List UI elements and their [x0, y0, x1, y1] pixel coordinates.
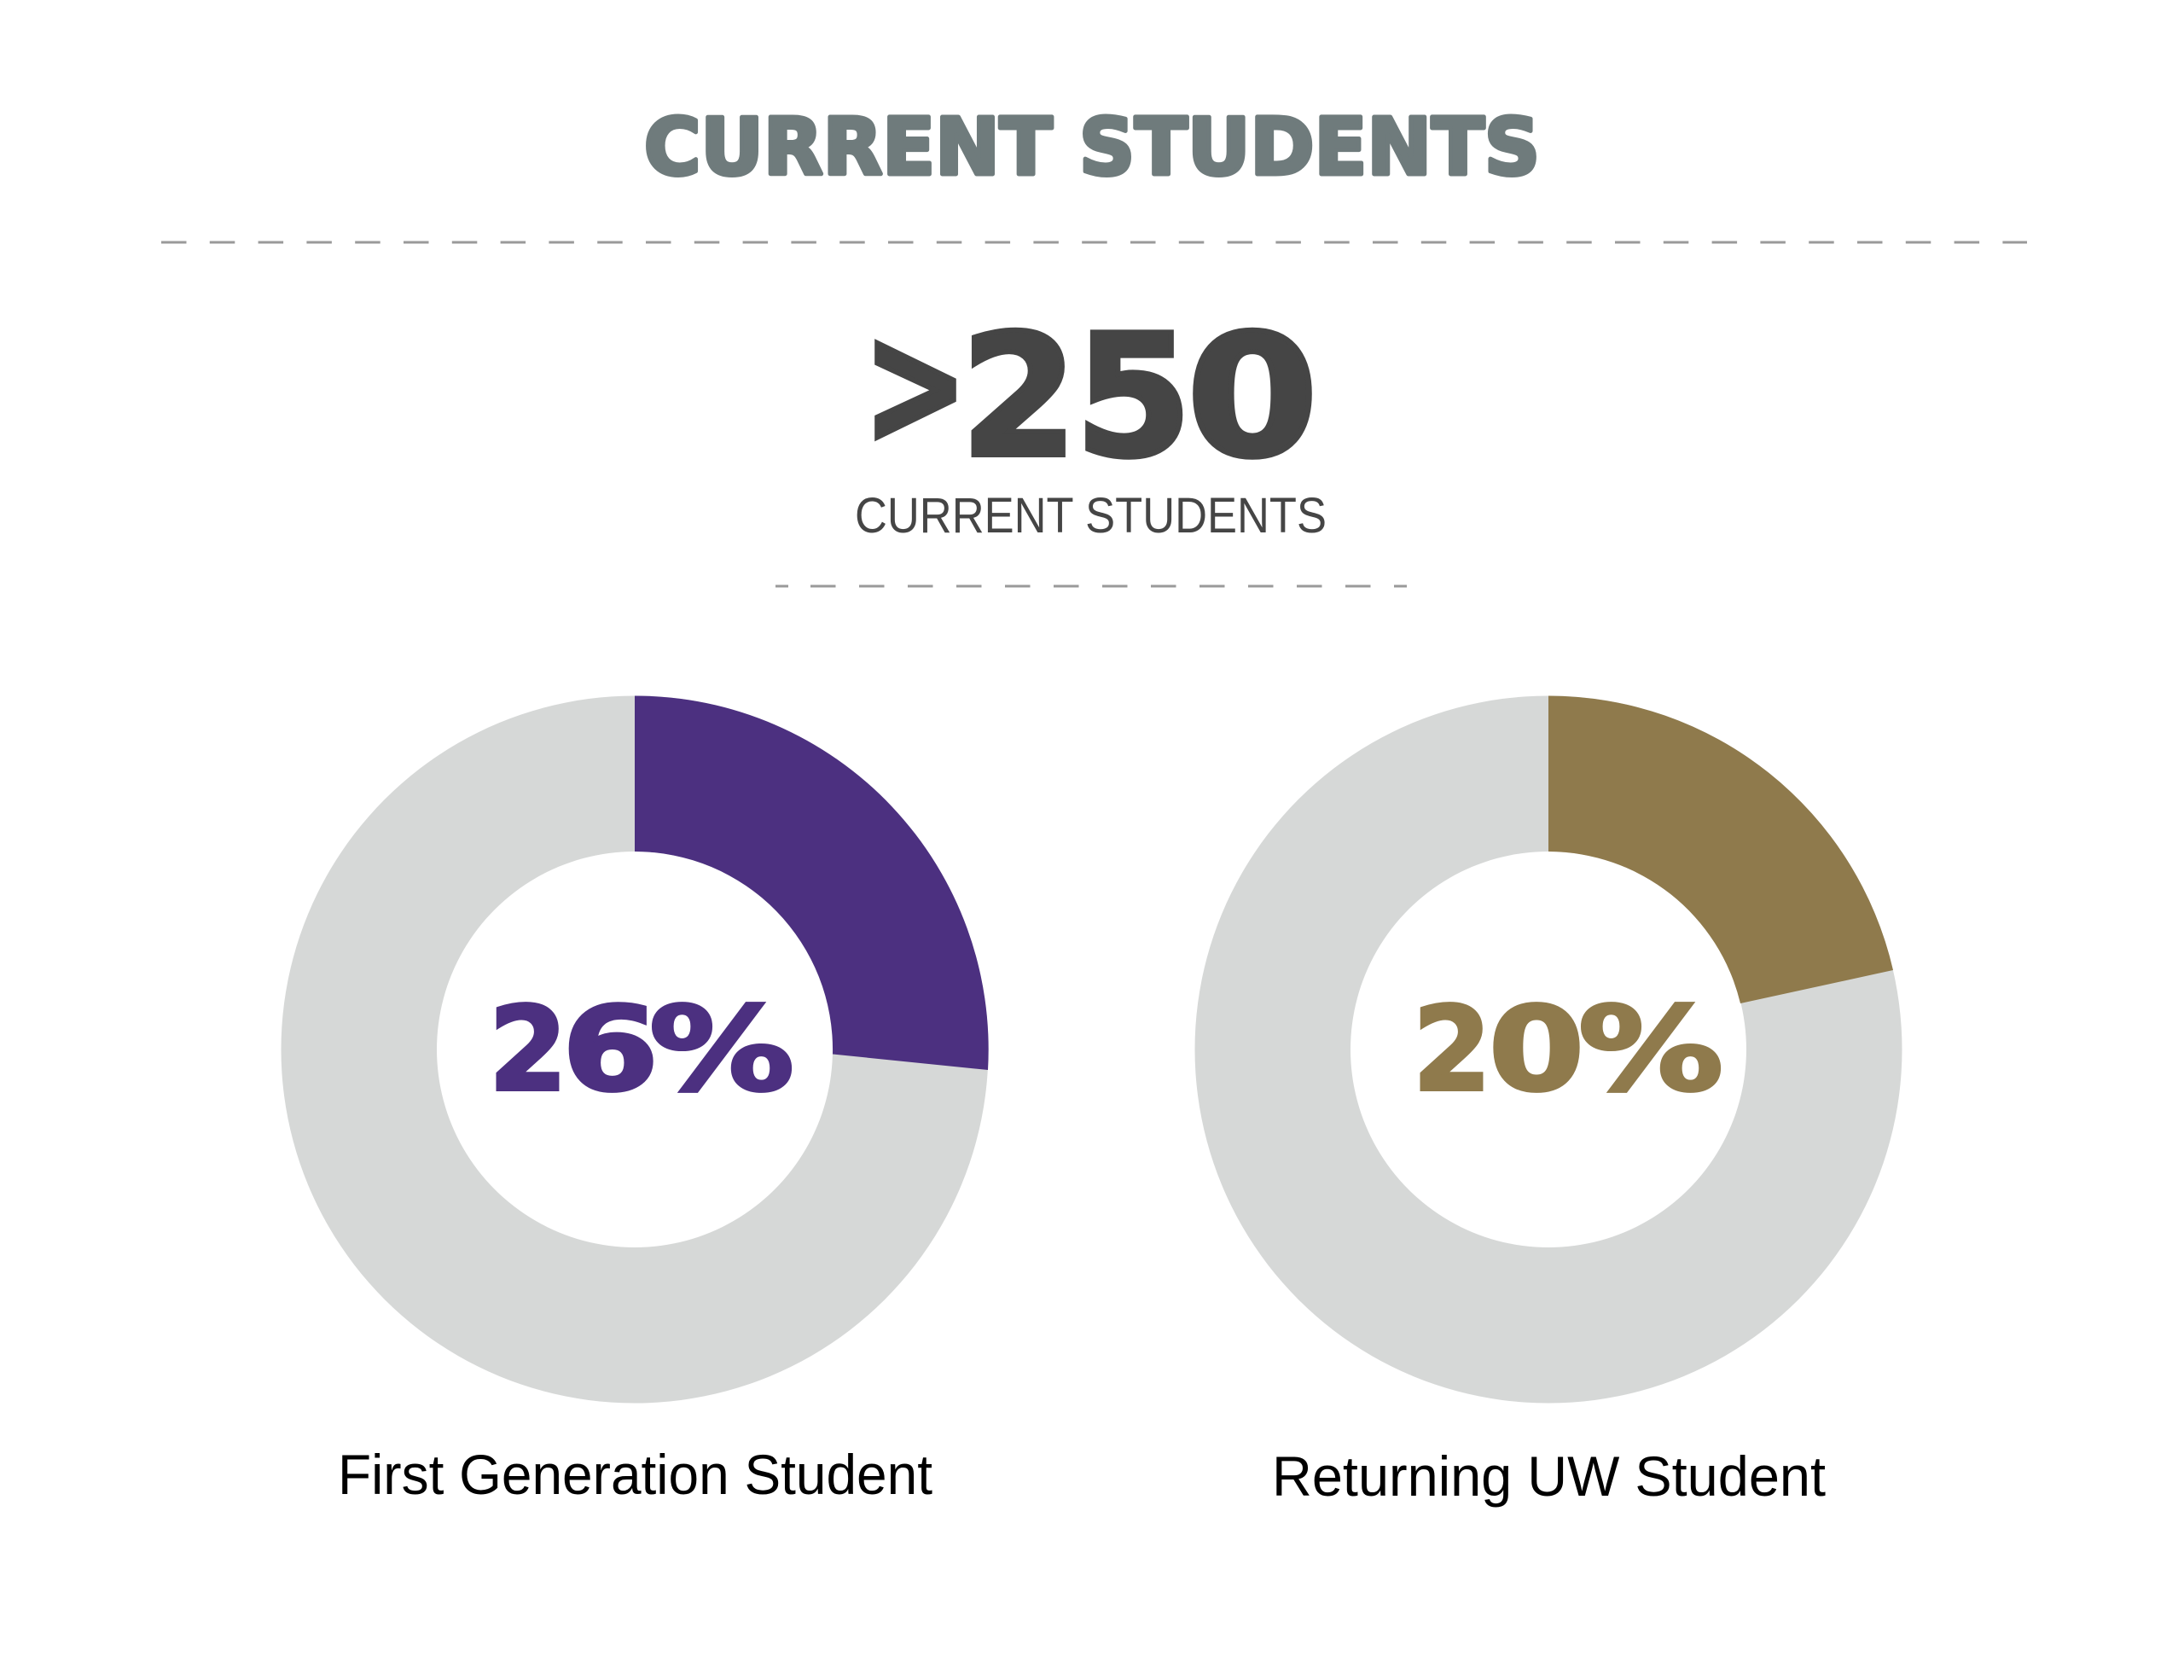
donut segment: purple: [635, 695, 989, 1070]
percentage value: 2: [489, 983, 567, 1118]
big number: >250: [863, 288, 1318, 495]
percentage value: %: [1578, 983, 1723, 1118]
donut track: [1195, 696, 1902, 1403]
percentage value: 6: [562, 983, 659, 1118]
donut segment: gold: [1548, 696, 1893, 1003]
percentage value: 2: [1413, 983, 1491, 1118]
percentage value: %: [649, 983, 794, 1118]
donut chart: first generation student 26%: [282, 695, 989, 1403]
donut label: returning UW student: Returning UW Student: [1272, 1445, 1826, 1508]
big number: >250: 0: [1187, 299, 1318, 495]
big number: >250: 2: [961, 299, 1077, 495]
donut track: [282, 696, 989, 1403]
big number: >250: 5: [1075, 299, 1192, 495]
donut label: first generation student: First Generation Student: [338, 1443, 932, 1506]
title: CURRENT STUDENTS: [644, 102, 1540, 193]
percentage value: 0: [1489, 983, 1584, 1118]
donut chart: returning UW student 20%: [1195, 696, 1902, 1403]
big number: >250: >: [863, 288, 967, 483]
subtitle: current students: CURRENT STUDENTS: [855, 488, 1327, 544]
